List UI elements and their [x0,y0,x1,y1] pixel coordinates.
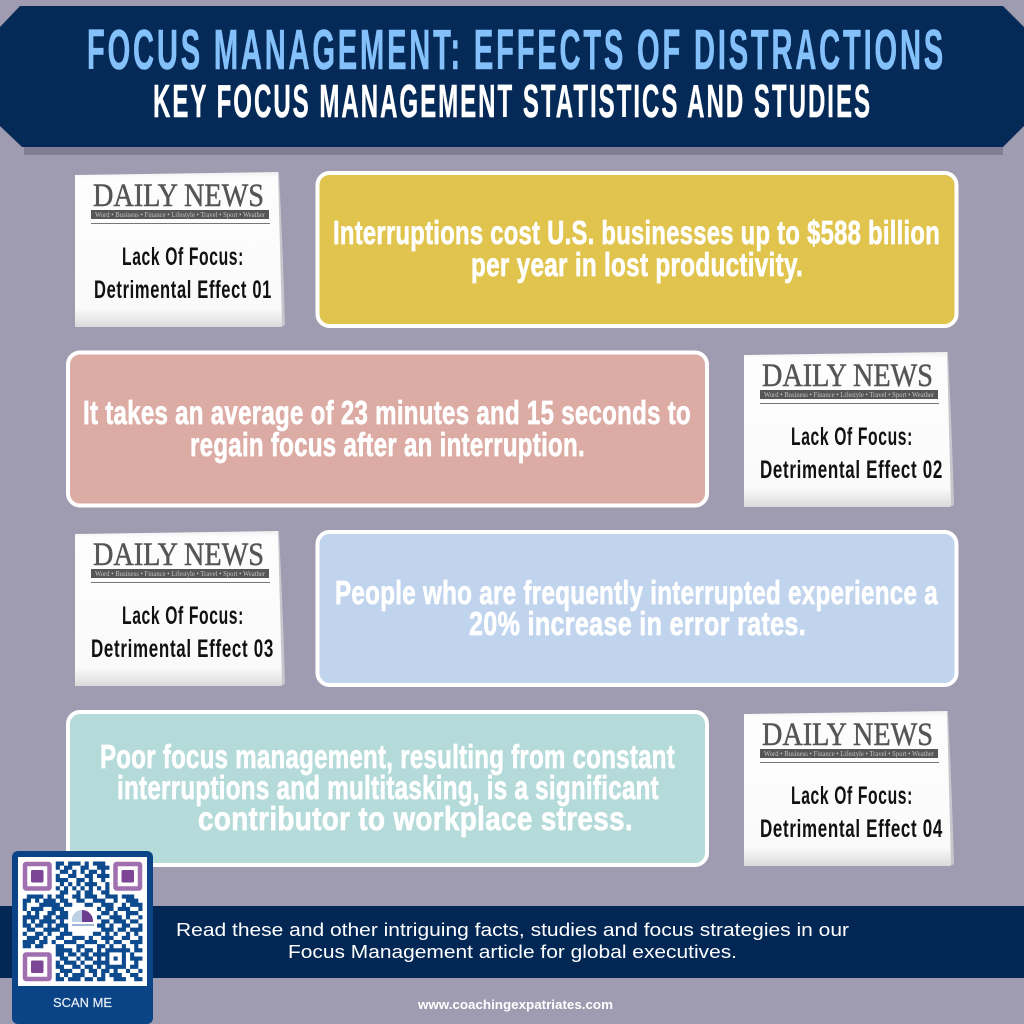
QR modules [23,864,142,979]
newspaper: effect 04: Detrimental Effect 04 [760,815,943,843]
title banner [0,6,1024,155]
newspaper: effect 02: Word • Business • Finance • Lifestyle • Travel • Sport • Weather [764,390,934,399]
newspaper: effect 01: Detrimental Effect 01 [94,276,272,304]
statistic box 4 [68,712,707,865]
QR code card [12,851,153,1024]
newspaper: effect 02: Lack Of Focus: [791,423,913,451]
statistic box 2: It takes an average of 23 minutes and 15 seconds to [83,394,691,431]
statistic box 3: 20% increase in error rates. [469,605,806,642]
statistic box 3 [318,532,956,685]
newspaper: effect 02: DAILY NEWS [762,358,933,394]
website address: www.coachingexpatriates.com [417,997,613,1012]
newspaper: effect 03: DAILY NEWS [93,537,264,573]
newspaper: effect 03 [75,531,285,686]
footer band [0,906,1024,978]
statistic box 1: per year in lost productivity. [471,246,803,283]
statistic box 4: interruptions and multitasking, is a significant [117,769,659,806]
statistic box 1 [318,173,956,326]
newspaper: effect 03: Word • Business • Finance • Lifestyle • Travel • Sport • Weather [95,569,265,578]
QR finder top-right [116,864,140,888]
newspaper: effect 04: DAILY NEWS [762,717,933,753]
newspaper: effect 01: Word • Business • Finance • Lifestyle • Travel • Sport • Weather [95,210,265,219]
newspaper: effect 04 [744,711,954,866]
newspaper: effect 01 [75,172,285,327]
scan me label: SCAN ME [53,995,112,1010]
newspaper: effect 04: Word • Business • Finance • Lifestyle • Travel • Sport • Weather [764,749,934,758]
newspaper: effect 03: Detrimental Effect 03 [91,635,274,663]
newspaper: effect 01: Lack Of Focus: [122,243,244,271]
statistic box 2: regain focus after an interruption. [190,426,585,463]
newspaper: effect 01: DAILY NEWS [93,178,264,214]
QR finder top-left [25,864,50,888]
QR centre logo [69,907,96,934]
footer band: Read these and other intriguing facts, studies and focus strategies in our [176,920,849,940]
statistic box 4: contributor to workplace stress. [198,800,633,837]
newspaper: effect 04: Lack Of Focus: [791,782,913,810]
newspaper: effect 03: Lack Of Focus: [122,602,244,630]
statistic box 2 [68,352,707,506]
QR finder bottom-left [25,954,50,979]
newspaper: effect 02: Detrimental Effect 02 [760,456,943,484]
newspaper: effect 02 [744,352,954,507]
statistic box 4: Poor focus management, resulting from constant [100,738,675,775]
footer band: Focus Management article for global executives. [288,942,737,962]
